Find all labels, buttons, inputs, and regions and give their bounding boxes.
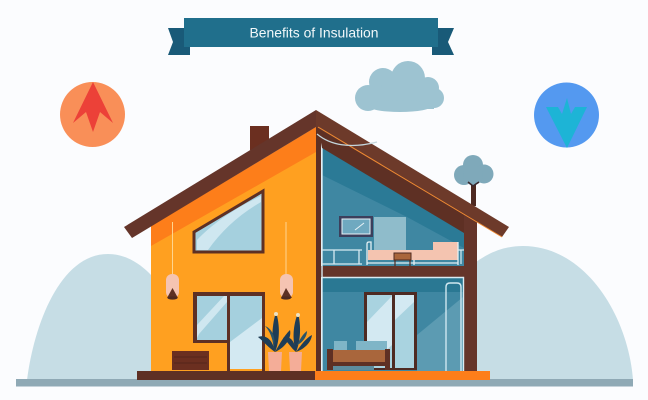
tree <box>454 155 494 206</box>
railing <box>322 250 362 264</box>
floor divider <box>320 266 470 277</box>
icon: warm up arrow <box>60 82 125 147</box>
ground strip <box>16 379 633 386</box>
cable <box>317 134 377 145</box>
lower room light patch <box>417 297 463 371</box>
title: Benefits of Insulation <box>250 24 378 40</box>
foundation right <box>315 371 490 380</box>
side table <box>394 253 411 266</box>
attic window <box>194 191 263 252</box>
interior white outline <box>322 140 464 371</box>
framed picture <box>339 216 373 237</box>
lower room door <box>364 292 417 370</box>
lower room ceiling shade <box>322 277 464 292</box>
title banner <box>168 18 454 55</box>
right lamp <box>280 222 293 300</box>
right wall <box>464 215 477 371</box>
banner right tail <box>432 28 454 55</box>
lower room tall shelf <box>446 283 461 371</box>
orange insulation line <box>318 127 502 237</box>
wall panel <box>374 217 406 250</box>
sofa <box>327 341 390 370</box>
orange wall <box>151 127 316 371</box>
foundation left <box>137 371 315 380</box>
ground-floor window and door <box>193 292 265 371</box>
centre post <box>316 125 321 371</box>
banner left tail <box>168 28 190 55</box>
right hill <box>476 246 633 380</box>
upper room interior <box>322 130 464 267</box>
house <box>124 110 509 380</box>
potted plants <box>258 312 312 371</box>
chimney <box>250 126 269 150</box>
storage box <box>172 351 209 370</box>
icon: cool down arrow <box>534 82 599 148</box>
roof wedge right <box>318 127 464 233</box>
left lamp <box>166 222 179 300</box>
banner body <box>184 18 438 47</box>
upper room lighter wall <box>322 175 464 267</box>
left hill <box>27 254 152 380</box>
lower room interior <box>322 277 464 371</box>
bed <box>367 242 464 265</box>
cloud <box>355 61 444 112</box>
roof right <box>316 110 509 237</box>
insulation band under left roof <box>151 127 316 246</box>
roof left <box>124 110 316 238</box>
